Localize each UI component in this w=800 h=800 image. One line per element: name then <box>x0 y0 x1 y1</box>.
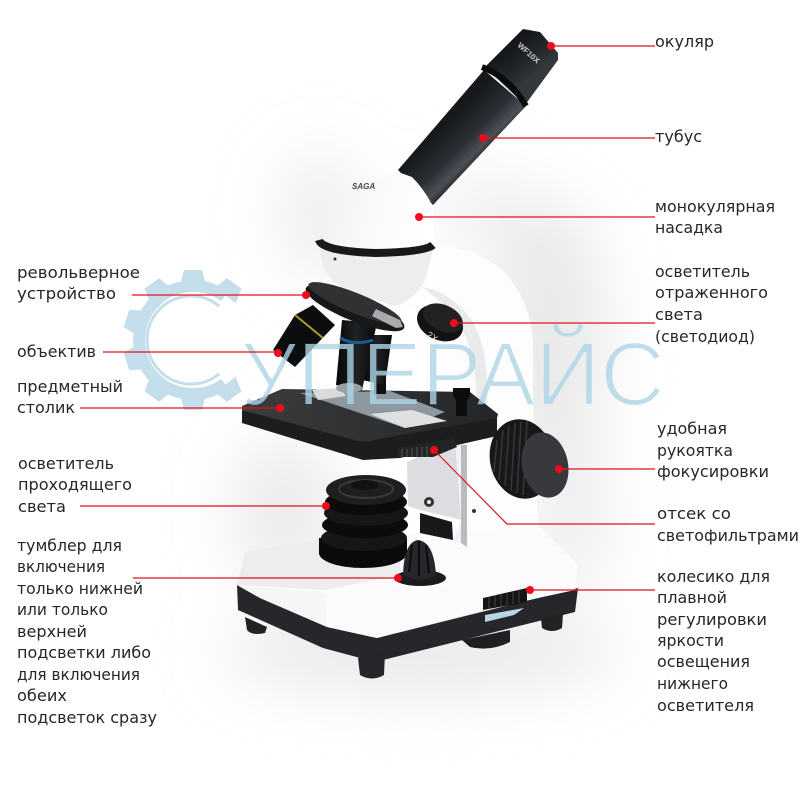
label: transmitted light <box>18 454 132 516</box>
brand: SAGA <box>352 182 375 191</box>
label: toggle: обеих <box>17 686 67 705</box>
monocular head <box>318 172 434 243</box>
upper light knob: 2X <box>425 329 440 344</box>
brightness wheel <box>483 588 527 622</box>
bracket under stage <box>407 438 476 547</box>
leader lines and dots <box>80 42 655 594</box>
label: eyepiece: окуляр <box>655 32 714 51</box>
label: filters: светофильтрами <box>657 526 799 545</box>
label: tube: тубус <box>655 127 702 146</box>
feet <box>245 617 267 634</box>
label: focus: рукоятка <box>657 441 733 460</box>
label: monocular <box>655 197 775 237</box>
label: brightness wheel: колесико для <box>657 567 770 586</box>
stage <box>242 378 498 460</box>
label: filters <box>657 504 799 545</box>
label: reflected light <box>655 262 768 346</box>
watermark: gear logo <box>122 270 245 410</box>
label: revolver <box>17 263 140 303</box>
label: toggle: включения <box>17 557 105 576</box>
label: toggle: тумблер для <box>17 536 122 555</box>
head <box>320 250 433 306</box>
label: transmitted light: света <box>18 497 66 516</box>
label: brightness wheel: осветителя <box>657 696 754 715</box>
label: brightness wheel: яркости <box>657 631 724 650</box>
label: brightness wheel <box>657 567 770 715</box>
label: reflected light: света <box>655 305 703 324</box>
label: toggle: для включения <box>17 665 140 684</box>
label: toggle: только нижней <box>17 579 143 598</box>
base <box>237 527 578 678</box>
label: focus: фокусировки <box>657 462 769 481</box>
label: brightness wheel: освещения <box>657 652 750 671</box>
arm <box>422 247 538 545</box>
label: revolver: устройство <box>17 284 116 303</box>
nosepiece <box>301 275 409 340</box>
label: reflected light: отраженного <box>655 283 768 302</box>
label: brightness wheel: регулировки <box>657 610 767 629</box>
label: reflected light: (светодиод) <box>655 327 755 346</box>
light filter stack <box>319 475 408 568</box>
label: filters: отсек со <box>657 504 731 523</box>
label: stage: предметный <box>17 377 123 396</box>
label: transmitted light: осветитель <box>18 454 114 473</box>
label: monocular: насадка <box>655 218 723 237</box>
label: toggle: подсветки либо <box>17 643 151 662</box>
label: focus <box>657 419 769 481</box>
eyepiece tube <box>398 70 526 205</box>
soft shadow behind microscope <box>220 150 620 695</box>
label: brightness wheel: нижнего <box>657 674 728 693</box>
label: brightness wheel: плавной <box>657 588 727 607</box>
toggle knob <box>392 540 448 589</box>
label: revolver: револьверное <box>17 263 140 282</box>
label: toggle: или только <box>17 600 108 619</box>
watermark: letters: УПЕРАЙС <box>240 323 665 425</box>
focus knob <box>482 413 574 505</box>
label: reflected light: осветитель <box>655 262 750 281</box>
label: monocular: монокулярная <box>655 197 775 216</box>
upper light knob <box>411 298 469 348</box>
label: transmitted light: проходящего <box>18 475 132 494</box>
left labels <box>17 263 157 727</box>
label: objective: объектив <box>17 342 96 361</box>
label: toggle: подсветок сразу <box>17 708 157 727</box>
microscope <box>237 29 578 678</box>
objectives <box>273 305 392 393</box>
right labels <box>655 32 799 715</box>
filter wheel <box>398 438 457 457</box>
label: toggle: верхней <box>17 622 87 641</box>
label: focus: удобная <box>657 419 727 438</box>
label: toggle <box>17 536 157 727</box>
label: stage <box>17 377 123 417</box>
eyepiece marking: WF10X <box>516 41 542 66</box>
label: stage: столик <box>17 398 75 417</box>
